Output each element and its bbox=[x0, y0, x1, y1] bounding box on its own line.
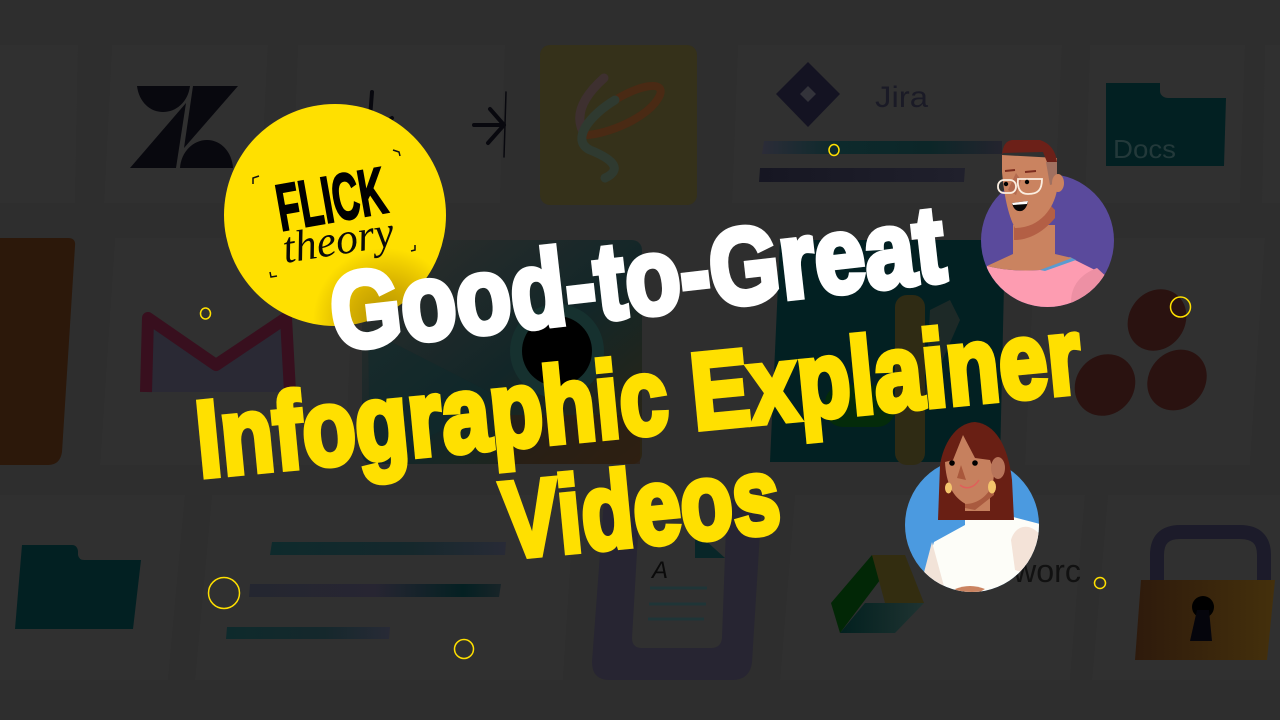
text lines card bbox=[226, 542, 506, 639]
panel: video play tile bbox=[362, 240, 642, 465]
icon: asana dots bbox=[1062, 278, 1219, 428]
avatar: woman with earrings bbox=[905, 422, 1045, 600]
panel: document tile bbox=[592, 500, 762, 680]
title line 3: Videos bbox=[497, 434, 785, 581]
logo badge: Flick Theory bbox=[224, 104, 446, 326]
icon: folder bottom left bbox=[15, 545, 141, 629]
title line 2: Infographic Explainer bbox=[191, 294, 1086, 500]
decorative yellow rings bbox=[200, 144, 1190, 658]
avatar: man with glasses bbox=[980, 140, 1114, 320]
icon: google drive bbox=[831, 555, 924, 633]
logo badge: Flick Theory: FLICK bbox=[271, 153, 392, 245]
icon: docs folder bbox=[1106, 83, 1226, 166]
icon: docs folder: Docs bbox=[1113, 134, 1176, 164]
icon: jira card bbox=[759, 62, 1002, 182]
panel: teal slide tile bbox=[770, 240, 1005, 465]
panel: yellow app tile bbox=[540, 45, 697, 205]
icon: padlock bbox=[1135, 532, 1275, 660]
panel: document tile: A bbox=[650, 557, 668, 584]
icon: zendesk logo bbox=[130, 86, 238, 168]
icon: jira card: Jira bbox=[875, 81, 928, 114]
icon: gmail M bbox=[144, 318, 290, 392]
icon: asterisk logo bbox=[370, 92, 506, 157]
panel: orange tile bbox=[0, 238, 75, 465]
logo badge: Flick Theory: theory bbox=[279, 207, 398, 273]
text: work label: worc bbox=[1012, 553, 1081, 589]
title line 1: Good-to-Great bbox=[324, 183, 951, 373]
